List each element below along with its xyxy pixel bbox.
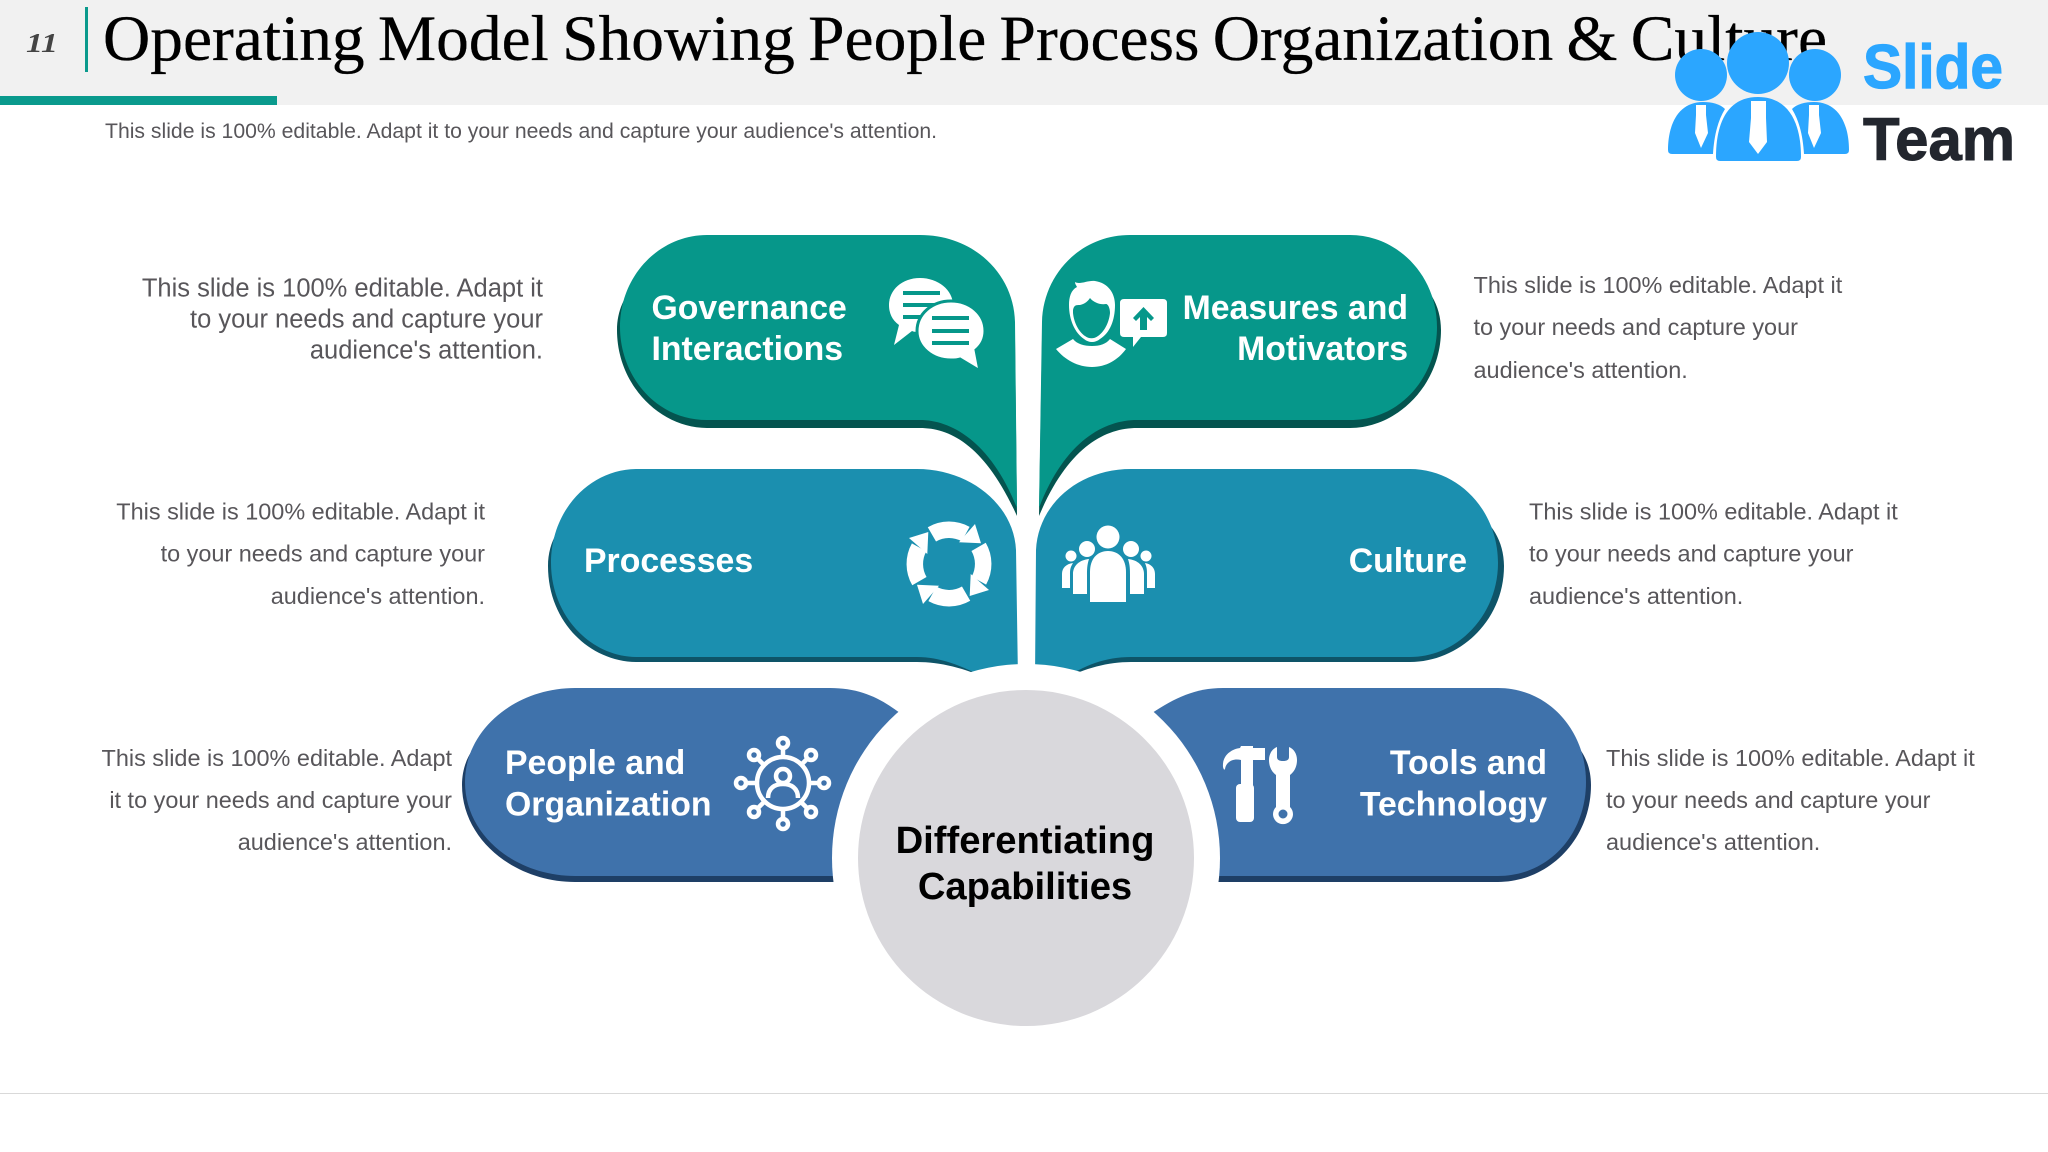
center circle: differentiating capabilities: Differentiating xyxy=(896,819,1154,862)
description: people xyxy=(102,745,452,855)
description: processes: This slide is 100% editable. Adapt it xyxy=(116,498,485,524)
panel: processes xyxy=(548,469,1018,680)
description: measures: This slide is 100% editable. Adapt it xyxy=(1474,272,1843,298)
label: governance: Interactions xyxy=(652,330,843,368)
title: Operating Model Showing People Process Organization & Culture xyxy=(103,3,1827,74)
logo: Slide Team: Slide xyxy=(1863,33,2003,102)
description: processes: to your needs and capture your xyxy=(161,540,485,566)
label: tools: Technology xyxy=(1360,786,1547,824)
description: governance xyxy=(142,274,544,364)
description: governance: to your needs and capture your xyxy=(190,306,544,334)
description: governance: This slide is 100% editable. Adapt it xyxy=(142,274,543,302)
description: culture xyxy=(1529,498,1898,609)
icon: cycle arrows xyxy=(909,524,989,604)
label: people: People and xyxy=(505,744,685,782)
description: tools xyxy=(1606,745,1975,855)
subtitle: This slide is 100% editable. Adapt it to your needs and capture your audience's attention. xyxy=(105,120,937,143)
icon: person network xyxy=(736,738,829,829)
description: tools: to your needs and capture your xyxy=(1606,787,1931,813)
description: people: it to your needs and capture your xyxy=(109,787,452,813)
description: tools: audience's attention. xyxy=(1606,829,1820,855)
description: processes: audience's attention. xyxy=(271,583,485,609)
description: people: audience's attention. xyxy=(238,829,452,855)
icon: person with upward message xyxy=(1056,281,1167,367)
center circle: differentiating capabilities xyxy=(832,664,1220,1052)
description: culture: to your needs and capture your xyxy=(1529,540,1854,566)
icon: chat bubbles xyxy=(889,278,985,371)
panel: measures xyxy=(1039,235,1441,516)
slide number: 11 xyxy=(26,28,58,58)
label: people: Organization xyxy=(505,786,712,824)
panel: people xyxy=(462,688,990,882)
description: measures xyxy=(1474,272,1843,383)
label: processes: Processes xyxy=(584,542,753,580)
description: culture: audience's attention. xyxy=(1529,583,1743,609)
panel: culture xyxy=(1035,469,1504,680)
description: measures: audience's attention. xyxy=(1474,357,1688,383)
panel: tools xyxy=(1060,688,1591,882)
center circle: differentiating capabilities: Capabilities xyxy=(918,865,1132,908)
description: people: This slide is 100% editable. Adapt xyxy=(102,745,452,771)
description: tools: This slide is 100% editable. Adapt it xyxy=(1606,745,1975,771)
label: governance: Governance xyxy=(652,289,847,327)
description: culture: This slide is 100% editable. Adapt it xyxy=(1529,498,1898,524)
panel: governance xyxy=(617,235,1017,516)
icon: hammer and wrench xyxy=(1223,746,1297,824)
description: governance: audience's attention. xyxy=(310,336,543,364)
label: measures: Motivators xyxy=(1237,330,1408,368)
logo: Slide Team: Team xyxy=(1863,106,2015,173)
description: measures: to your needs and capture your xyxy=(1474,314,1798,340)
icon: group of people xyxy=(1062,526,1155,602)
label: measures: Measures and xyxy=(1183,289,1408,327)
logo: Slide Team xyxy=(1668,32,2015,173)
label: tools: Tools and xyxy=(1390,744,1547,782)
label: culture: Culture xyxy=(1349,542,1467,580)
header band xyxy=(0,0,2048,105)
description: processes xyxy=(116,498,485,609)
